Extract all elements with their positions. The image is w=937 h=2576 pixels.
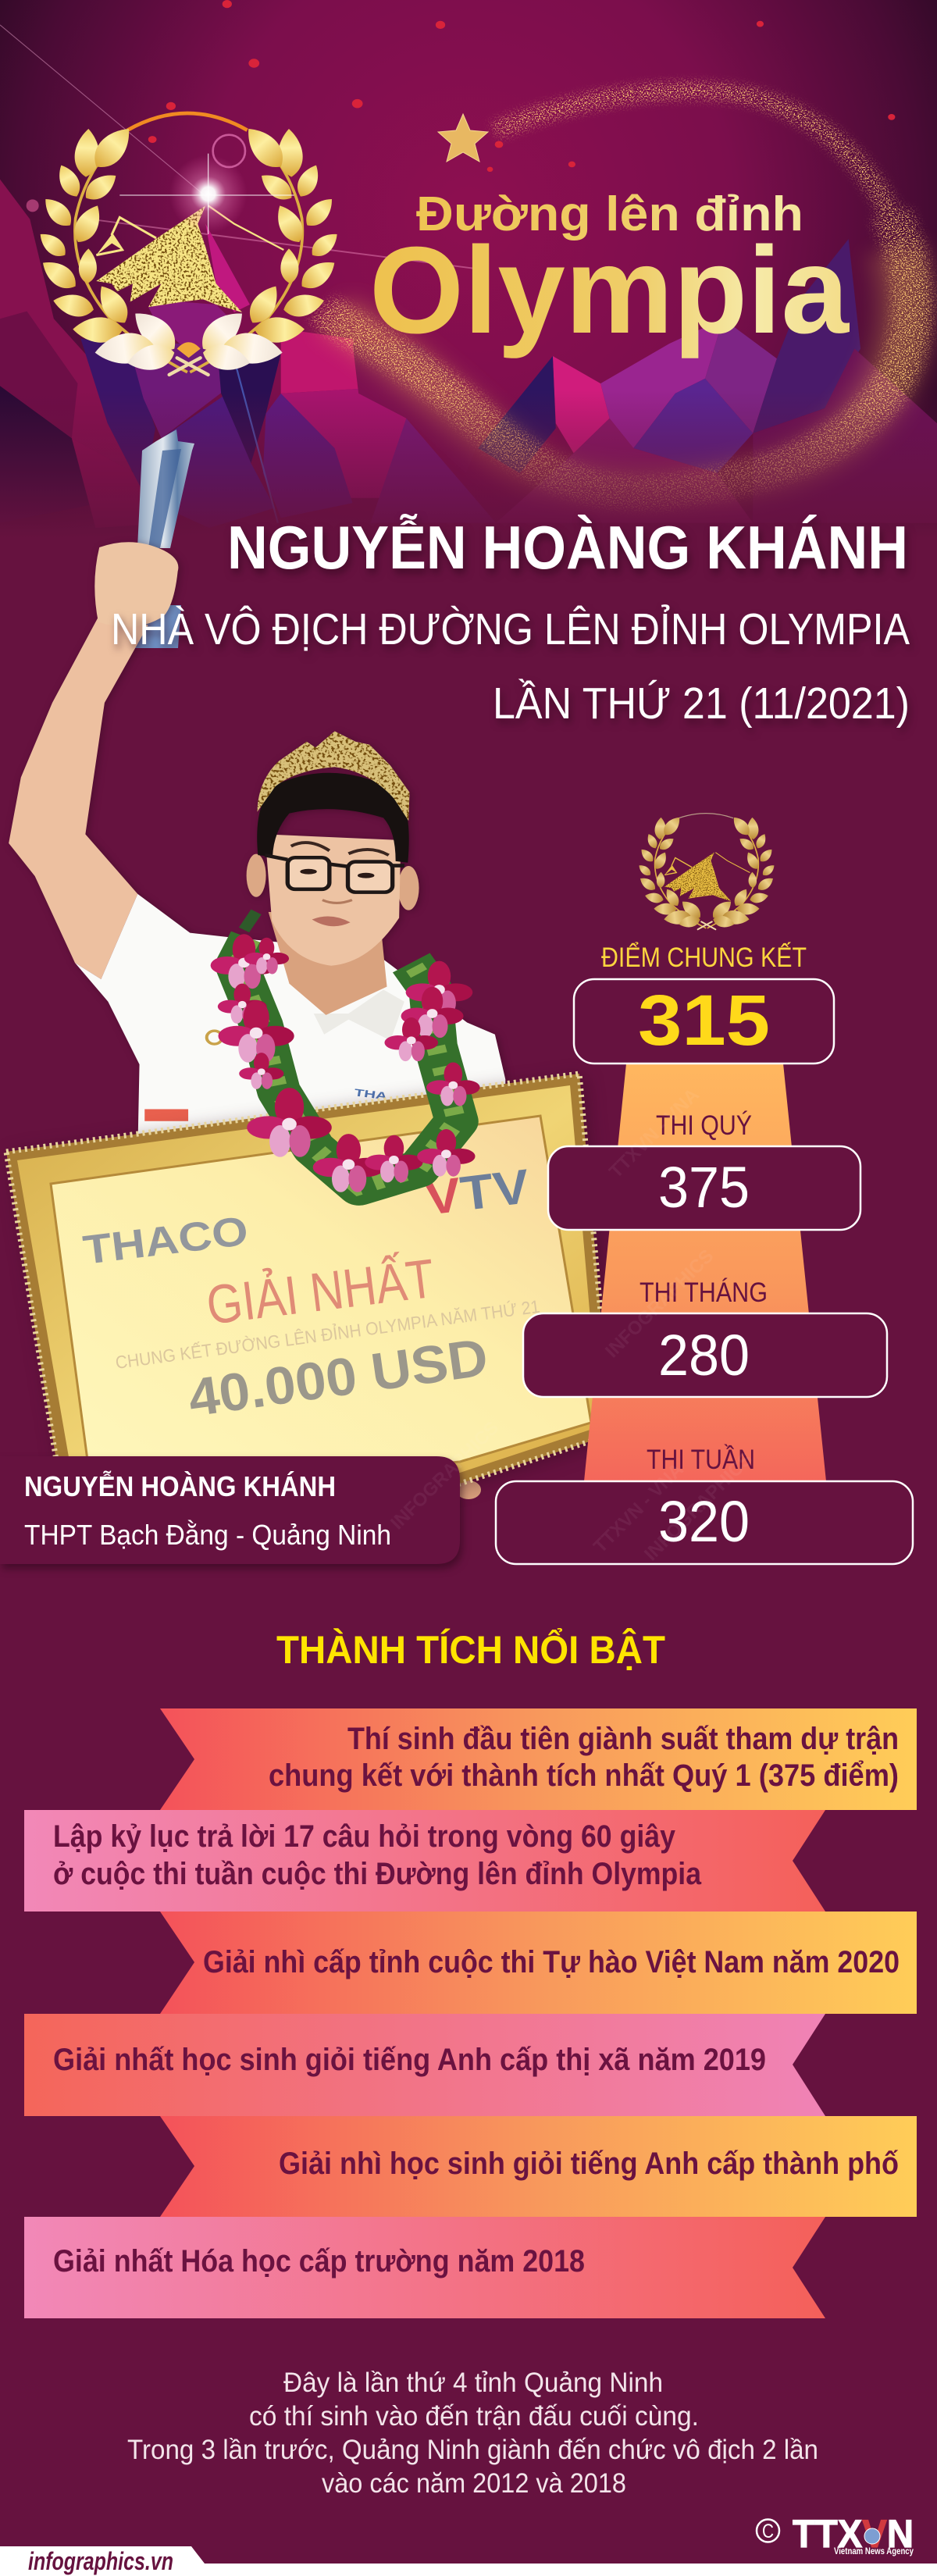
score: month round 280: 280 — [658, 1323, 750, 1388]
title: Đường lên đỉnh Olympia: Đường lên đỉnh — [416, 187, 803, 241]
icon: gold star — [438, 114, 488, 162]
shirt details — [144, 1031, 388, 1121]
score: month round 280: THI THÁNG — [640, 1277, 768, 1308]
face — [265, 834, 401, 966]
ears — [247, 854, 419, 910]
pyramid: score trapezoid — [584, 1064, 826, 1481]
photo: prize frame THACO Giải nhất 40.000 USD: VTV — [422, 1160, 533, 1226]
neck — [269, 912, 387, 1015]
name card: NGUYỄN HOÀNG KHÁNH — [24, 1470, 336, 1502]
ribbon 4: Giải nhất học sinh giỏi tiếng Anh cấp thị xã năm 2019 — [53, 2043, 766, 2077]
closing note: có thí sinh vào đến trận đấu cuối cùng. — [249, 2401, 699, 2432]
watermarks: INFOGRAPHICS — [387, 1417, 503, 1534]
subheading: edition: LẦN THỨ 21 (11/2021) — [493, 678, 910, 729]
watermarks: TTXVN - VNA — [590, 1459, 688, 1557]
footer tab: infographics.vn: infographics.vn — [28, 2547, 173, 2575]
hand — [94, 542, 178, 627]
score: final round 315: ĐIỂM CHUNG KẾT — [601, 942, 807, 973]
polo shirt — [75, 894, 505, 1151]
ribbon 3 — [160, 1912, 917, 2014]
ribbon 1 — [160, 1708, 917, 1810]
shirt details: THA — [354, 1086, 388, 1102]
score: month round 280 — [523, 1277, 887, 1397]
header: low-poly mountain background — [0, 0, 937, 539]
footer white strip — [0, 2564, 937, 2576]
fade of header into background — [0, 390, 937, 539]
photo: winner with raised arm — [9, 542, 505, 1151]
icon: small gold wreath — [636, 814, 777, 929]
photo: prize frame THACO Giải nhất 40.000 USD: 40.000 USD — [185, 1327, 491, 1428]
score: quarter round 375: THI QUÝ — [656, 1110, 752, 1141]
score: quarter round 375 — [548, 1110, 860, 1230]
score: week round 320: 320 — [658, 1489, 750, 1554]
ribbon 6: Giải nhất Hóa học cấp trường năm 2018 — [53, 2244, 585, 2278]
closing note — [127, 2368, 818, 2499]
photo: trophy — [113, 429, 194, 648]
watermarks: INFOGRAPHICS — [601, 1245, 718, 1362]
watermarks: INFOGRAPHICS — [640, 1448, 757, 1565]
logo: Olympia laurel wreath — [27, 113, 342, 375]
photo: prize frame THACO Giải nhất 40.000 USD: GIẢI NHẤT — [203, 1248, 438, 1336]
score: final round 315: 315 — [638, 981, 770, 1060]
name card: THPT Bạch Đằng - Quảng Ninh — [24, 1519, 391, 1551]
title: Đường lên đỉnh Olympia: Olympia — [369, 222, 850, 359]
facial features — [291, 843, 389, 926]
frame texts: THACO — [80, 1209, 251, 1274]
ribbon 2: Lập kỷ lục trả lời 17 câu hỏi trong vòng 60 giây — [53, 1819, 676, 1854]
score: final round 315 — [574, 942, 834, 1064]
glasses — [265, 855, 404, 893]
photo: flower lei — [211, 912, 480, 1192]
ribbon 6 — [24, 2217, 825, 2318]
ribbon 5 — [160, 2116, 917, 2217]
name card — [0, 1456, 460, 1564]
ribbon 2: ở cuộc thi tuần cuộc thi Đường lên đỉnh Olympia — [53, 1857, 702, 1891]
ribbon 2 — [24, 1810, 825, 1912]
ribbon 4 — [24, 2014, 825, 2116]
watermarks — [387, 1085, 757, 1565]
score: week round 320 — [496, 1444, 913, 1564]
raised arm — [9, 617, 148, 979]
photo: prize frame THACO Giải nhất 40.000 USD — [6, 1074, 611, 1523]
score: quarter round 375: 375 — [658, 1155, 750, 1220]
heading: achievements: THÀNH TÍCH NỔI BẬT — [276, 1627, 665, 1672]
photo: prize frame THACO Giải nhất 40.000 USD: CHUNG KẾT ĐƯỜNG LÊN ĐỈNH OLYMPIA NĂM THỨ 21 — [114, 1295, 541, 1373]
closing note: vào các năm 2012 và 2018 — [322, 2468, 626, 2499]
closing note: Trong 3 lần trước, Quảng Ninh giành đến chức vô địch 2 lần — [127, 2435, 818, 2465]
gold sparkle swoosh — [322, 91, 912, 493]
score: week round 320: THI TUẦN — [647, 1444, 755, 1475]
hair — [257, 773, 409, 863]
logo: copyright TTXVN: Vietnam News Agency — [834, 2547, 914, 2556]
closing note: Đây là lần thứ 4 tỉnh Quảng Ninh — [283, 2368, 663, 2398]
crown — [257, 731, 410, 821]
logo: copyright TTXVN: C — [762, 2521, 774, 2542]
watermarks: TTXVN - VNA — [605, 1085, 704, 1182]
logo: copyright TTXVN: TTXVN — [793, 2512, 914, 2556]
